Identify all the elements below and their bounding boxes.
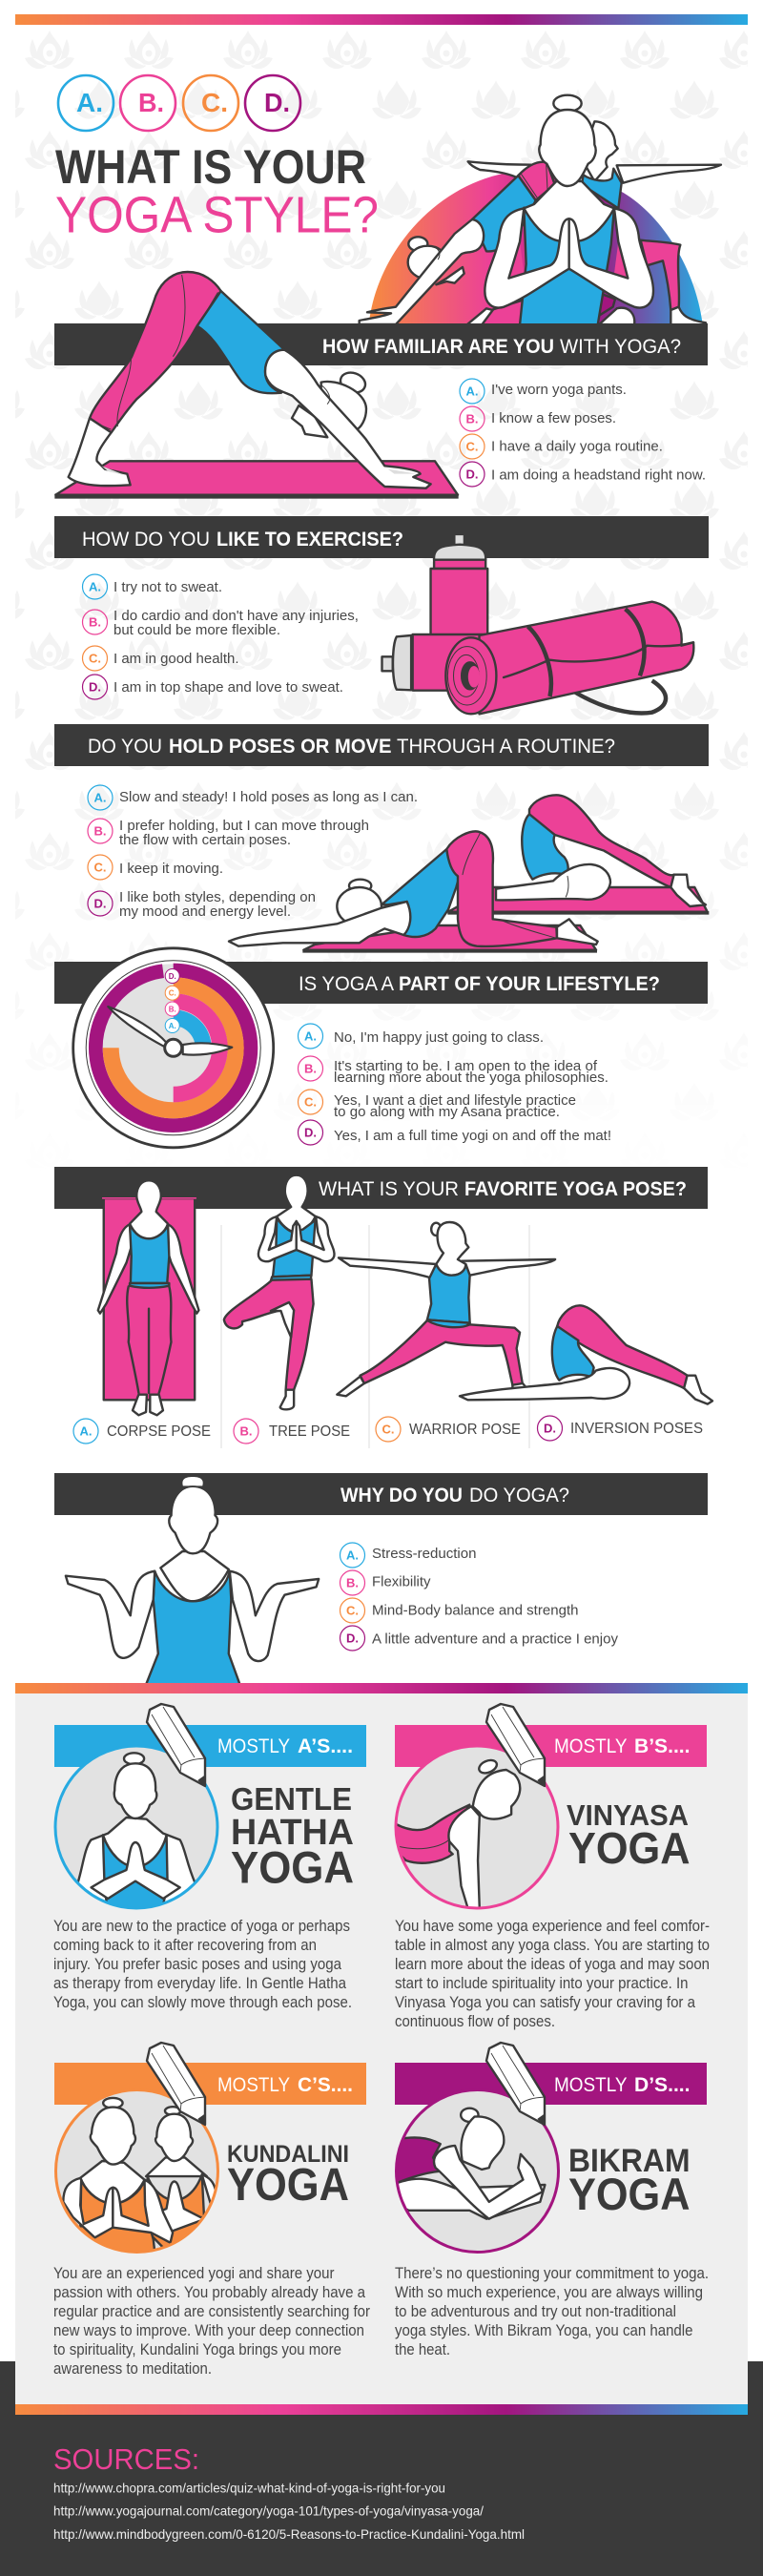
answer 1D: D. bbox=[465, 467, 479, 481]
answer 4A: No, I'm happy just going to class. bbox=[334, 1029, 544, 1046]
result B: vinyasa yoga bbox=[393, 1704, 710, 2030]
illustration: shrugging yogi bbox=[66, 1477, 319, 1687]
bottom gradient bar bbox=[15, 2404, 748, 2415]
question bar 2 bbox=[54, 516, 709, 558]
answer letters A B C D bbox=[58, 75, 300, 131]
label tree pose bbox=[234, 1419, 350, 1444]
question bar 6 bbox=[54, 1473, 708, 1515]
question bar 6: DO YOGA? bbox=[469, 1485, 569, 1506]
answer 4B bbox=[298, 1056, 608, 1086]
answer 1D bbox=[460, 462, 706, 487]
text D: the heat. bbox=[395, 2340, 450, 2358]
top gradient bar bbox=[15, 14, 748, 25]
answer 4A bbox=[298, 1024, 544, 1049]
heading C bbox=[227, 2141, 349, 2211]
question bar 6: WHY DO YOU bbox=[340, 1485, 463, 1506]
text C: regular practice and are consistently searching for bbox=[53, 2302, 370, 2320]
text B: continuous flow of poses. bbox=[395, 2012, 555, 2030]
question bar 5: FAVORITE YOGA POSE? bbox=[464, 1178, 687, 1200]
question bar 3: HOLD POSES OR MOVE bbox=[169, 736, 391, 758]
answer 4B: It's starting to be. I am open to the idea of bbox=[334, 1058, 598, 1074]
answer 4B: B. bbox=[304, 1061, 317, 1076]
answer 3D: D. bbox=[93, 897, 107, 910]
result D: bikram yoga bbox=[392, 2043, 709, 2358]
title bbox=[55, 140, 379, 244]
answer 2A bbox=[82, 574, 222, 599]
answer 2D bbox=[82, 675, 343, 699]
clock hands bbox=[108, 1007, 232, 1056]
answer 6A: A. bbox=[346, 1548, 359, 1563]
question bar 5: WHAT IS YOUR bbox=[319, 1178, 459, 1200]
text C: awareness to meditation. bbox=[53, 2359, 212, 2378]
answers 6 bbox=[340, 1543, 618, 1651]
ring C orange bbox=[111, 986, 236, 1111]
text D: to be adventurous and try out non-traditional bbox=[395, 2302, 676, 2320]
answer 3D: my mood and energy level. bbox=[119, 904, 291, 920]
answer 1C: I have a daily yoga routine. bbox=[491, 439, 663, 454]
question bar 3 bbox=[54, 724, 709, 766]
label inversion poses: D. bbox=[544, 1422, 556, 1435]
tree pose bbox=[224, 1175, 335, 1409]
text B: Vinyasa Yoga you can satisfy your craving for a bbox=[395, 1993, 695, 2011]
text C: You are an experienced yogi and share your bbox=[53, 2264, 335, 2282]
pencil C bbox=[147, 2043, 205, 2125]
answer 4B: learning more about the yoga philosophies. bbox=[334, 1070, 608, 1086]
banner C: MOSTLY bbox=[217, 2074, 290, 2096]
pencil A bbox=[147, 1704, 205, 1786]
answer 6A bbox=[340, 1543, 477, 1568]
banner D: D’S.... bbox=[634, 2074, 691, 2096]
answer 3D bbox=[88, 889, 316, 920]
text C: passion with others. You probably already have a bbox=[53, 2283, 365, 2301]
middle gradient bar bbox=[15, 1683, 748, 1693]
inversion pose bbox=[460, 1305, 712, 1404]
answer 2A: A. bbox=[89, 580, 101, 593]
warrior pose bbox=[337, 1222, 555, 1396]
answer 1A bbox=[460, 379, 627, 404]
label corpse pose bbox=[73, 1419, 211, 1444]
illustration: plow pose and child's pose on mats bbox=[229, 795, 709, 953]
answer 2D: I am in top shape and love to sweat. bbox=[113, 679, 343, 696]
question bar 2: HOW DO YOU bbox=[82, 529, 210, 551]
back figure bbox=[145, 2106, 216, 2247]
answer letters A B C D: B. bbox=[138, 88, 164, 117]
answer 2A: I try not to sweat. bbox=[113, 579, 222, 595]
text A: injury. You prefer basic poses and using yoga bbox=[53, 1955, 341, 1973]
text D: With so much experience, you are always willing bbox=[395, 2283, 703, 2301]
clock chart bbox=[73, 948, 274, 1148]
ring B pink bbox=[174, 1002, 219, 1094]
answer 4D: Yes, I am a full time yogi on and off the mat! bbox=[334, 1128, 611, 1144]
answer 2C: I am in good health. bbox=[113, 651, 238, 667]
badge illustration A bbox=[55, 1746, 217, 1911]
pencil D bbox=[486, 2043, 545, 2125]
pose labels bbox=[73, 1416, 703, 1444]
label warrior pose bbox=[376, 1417, 521, 1442]
answer 4A: A. bbox=[304, 1028, 317, 1044]
answer 2B: B. bbox=[89, 614, 101, 630]
hero illustration: yogis over rainbow arc bbox=[360, 95, 721, 325]
banner C bbox=[54, 2063, 366, 2105]
text D: There’s no questioning your commitment to yoga. bbox=[395, 2264, 709, 2282]
answer 3D: I like both styles, depending on bbox=[119, 889, 316, 905]
sources heading: SOURCES: bbox=[53, 2442, 199, 2476]
question bar 4 bbox=[54, 962, 708, 1004]
answer 1C: C. bbox=[465, 439, 479, 454]
banner C: C’S.... bbox=[298, 2074, 353, 2096]
question bar 1: HOW FAMILIAR ARE YOU bbox=[322, 336, 554, 358]
answer 3A bbox=[88, 785, 418, 810]
pose illustrations bbox=[98, 1175, 712, 1415]
answer 3C: I keep it moving. bbox=[119, 861, 223, 877]
banner D bbox=[395, 2063, 707, 2105]
corpse pose bbox=[98, 1180, 198, 1415]
answer 4D bbox=[298, 1120, 611, 1145]
answer 6D: D. bbox=[346, 1631, 359, 1645]
source list: http://www.mindbodygreen.com/0-6120/5-Reasons-to-Practice-Kundalini-Yoga.html bbox=[53, 2526, 525, 2542]
answers 3 bbox=[88, 785, 418, 920]
text B: You have some yoga experience and feel comfor- bbox=[395, 1917, 710, 1935]
answer 3C bbox=[88, 855, 223, 880]
text D bbox=[395, 2264, 709, 2358]
answer 4C: to go along with my Asana practice. bbox=[334, 1104, 560, 1120]
heading B: YOGA bbox=[568, 1823, 691, 1873]
result A: gentle hatha yoga bbox=[53, 1704, 366, 2011]
text A: Yoga, you can slowly move through each pose. bbox=[53, 1993, 352, 2011]
question bar 3: THROUGH A ROUTINE? bbox=[397, 736, 615, 758]
question bar 2: LIKE TO EXERCISE? bbox=[217, 529, 403, 551]
heading D bbox=[568, 2143, 691, 2219]
ring badges: A. bbox=[169, 1022, 176, 1030]
question bar 5 bbox=[54, 1167, 708, 1209]
answer 6D bbox=[340, 1626, 618, 1651]
answer 6A: Stress-reduction bbox=[372, 1546, 477, 1562]
heading A: HATHA bbox=[231, 1813, 354, 1853]
ring badges: C. bbox=[169, 989, 176, 998]
label warrior pose: WARRIOR POSE bbox=[409, 1422, 521, 1438]
label corpse pose: A. bbox=[80, 1423, 92, 1439]
question bar 4: IS YOGA A bbox=[299, 973, 394, 995]
answers 4 bbox=[298, 1024, 611, 1145]
ring D purple bbox=[95, 970, 251, 1126]
heading C: KUNDALINI bbox=[227, 2141, 349, 2168]
answer 6C bbox=[340, 1598, 578, 1623]
question bar 4: PART OF YOUR LIFESTYLE? bbox=[399, 973, 660, 995]
heading C: YOGA bbox=[227, 2160, 349, 2211]
answer 1A: A. bbox=[465, 384, 479, 399]
text B bbox=[395, 1917, 710, 2030]
text A: You are new to the practice of yoga or perhaps bbox=[53, 1917, 350, 1935]
answer 4D: D. bbox=[304, 1126, 317, 1139]
source list bbox=[53, 2481, 525, 2542]
heading D: YOGA bbox=[568, 2169, 691, 2219]
source list: http://www.yogajournal.com/category/yoga-101/types-of-yoga/vinyasa-yoga/ bbox=[53, 2503, 484, 2519]
answer 3A: A. bbox=[93, 790, 107, 805]
banner B: MOSTLY bbox=[554, 1735, 628, 1757]
answer 2C: C. bbox=[89, 651, 101, 666]
answer 6D: A little adventure and a practice I enjoy bbox=[372, 1631, 618, 1647]
answer 6B: Flexibility bbox=[372, 1574, 431, 1589]
answer letters A B C D: D. bbox=[264, 88, 290, 117]
answer 3B bbox=[88, 818, 369, 848]
text D: yoga styles. With Bikram Yoga, you can handle bbox=[395, 2321, 692, 2339]
text A: as therapy from everyday life. In Gentle Hatha bbox=[53, 1974, 346, 1992]
label tree pose: B. bbox=[240, 1423, 252, 1439]
text B: table in almost any yoga class. You are starting to bbox=[395, 1936, 710, 1954]
front figure bbox=[63, 2098, 173, 2260]
ring badges: B. bbox=[169, 1006, 176, 1013]
text C: new ways to improve. With your deep connection bbox=[53, 2321, 364, 2339]
ring badges: D. bbox=[169, 972, 176, 981]
illustration: downward dog on mat bbox=[54, 272, 459, 499]
results panel bbox=[15, 1693, 748, 2404]
label warrior pose: C. bbox=[382, 1422, 395, 1437]
source list: http://www.chopra.com/articles/quiz-what-kind-of-yoga-is-right-for-you bbox=[53, 2481, 445, 2496]
badge illustration D bbox=[392, 2089, 559, 2252]
answer 4C bbox=[298, 1090, 576, 1120]
answer 3C: C. bbox=[93, 861, 107, 874]
illustration: water bottles and rolled mat bbox=[382, 535, 693, 714]
result C: kundalini yoga bbox=[53, 2043, 370, 2378]
answer 2B bbox=[82, 608, 359, 638]
badge illustration C bbox=[55, 2089, 221, 2260]
heading B bbox=[567, 1798, 691, 1873]
badge illustration B bbox=[393, 1746, 558, 1908]
answer 2D: D. bbox=[89, 679, 101, 695]
answer 4C: C. bbox=[304, 1095, 317, 1109]
answer 1C bbox=[460, 434, 663, 459]
label inversion poses: INVERSION POSES bbox=[570, 1421, 703, 1437]
answer 4C: Yes, I want a diet and lifestyle practice bbox=[334, 1092, 576, 1109]
answer 3B: the flow with certain poses. bbox=[119, 832, 291, 848]
ring badges bbox=[165, 969, 179, 1032]
text B: start to include spirituality into your practice. In bbox=[395, 1974, 689, 1992]
title: YOGA STYLE? bbox=[55, 187, 379, 244]
answer letters A B C D: A. bbox=[76, 88, 103, 117]
heading B: VINYASA bbox=[567, 1798, 689, 1832]
banner A: A’S.... bbox=[298, 1735, 353, 1757]
text A: coming back to it after recovering from an bbox=[53, 1936, 317, 1954]
text B: learn more about the ideas of yoga and may soon bbox=[395, 1955, 710, 1973]
answer 2C bbox=[82, 646, 238, 671]
question bar 1 bbox=[54, 323, 708, 365]
pencil B bbox=[486, 1704, 545, 1786]
answer 3B: B. bbox=[93, 824, 107, 838]
answer 6C: C. bbox=[346, 1603, 359, 1618]
banner B: B’S.... bbox=[634, 1735, 691, 1757]
label inversion poses bbox=[538, 1416, 703, 1441]
answer 6C: Mind-Body balance and strength bbox=[372, 1603, 578, 1618]
answer letters A B C D: C. bbox=[201, 88, 228, 117]
label tree pose: TREE POSE bbox=[269, 1423, 350, 1440]
text A bbox=[53, 1917, 352, 2011]
answer 6B: B. bbox=[346, 1576, 359, 1589]
banner A: MOSTLY bbox=[217, 1735, 290, 1757]
answer 1B: B. bbox=[465, 412, 479, 426]
answers 2 bbox=[82, 574, 359, 699]
answer 1B: I know a few poses. bbox=[491, 410, 616, 426]
title: WHAT IS YOUR bbox=[55, 140, 366, 194]
heading D: BIKRAM bbox=[568, 2143, 691, 2179]
answer 1A: I've worn yoga pants. bbox=[491, 382, 627, 398]
heading A: GENTLE bbox=[231, 1781, 352, 1817]
banner D: MOSTLY bbox=[554, 2074, 628, 2096]
banner B bbox=[395, 1725, 707, 1767]
answer 3A: Slow and steady! I hold poses as long as I can. bbox=[119, 789, 418, 805]
answer 3B: I prefer holding, but I can move through bbox=[119, 818, 369, 834]
sources bbox=[53, 2442, 525, 2542]
answers 1 bbox=[460, 379, 706, 487]
heading A bbox=[231, 1781, 354, 1893]
answer 2B: I do cardio and don't have any injuries, bbox=[113, 608, 359, 624]
answer 1B bbox=[460, 406, 616, 431]
text C: to spirituality, Kundalini Yoga brings you more bbox=[53, 2340, 341, 2358]
heading A: YOGA bbox=[231, 1841, 354, 1893]
question bar 1: WITH YOGA? bbox=[560, 336, 681, 358]
question bar 3: DO YOU bbox=[88, 736, 162, 758]
answer 2B: but could be more flexible. bbox=[113, 622, 280, 638]
ring A blue bbox=[174, 1018, 203, 1048]
banner A bbox=[54, 1725, 366, 1767]
answer 1D: I am doing a headstand right now. bbox=[491, 467, 706, 483]
text C bbox=[53, 2264, 370, 2378]
label corpse pose: CORPSE POSE bbox=[107, 1423, 211, 1440]
footer dark band bbox=[0, 2361, 763, 2576]
answer 6B bbox=[340, 1570, 431, 1595]
